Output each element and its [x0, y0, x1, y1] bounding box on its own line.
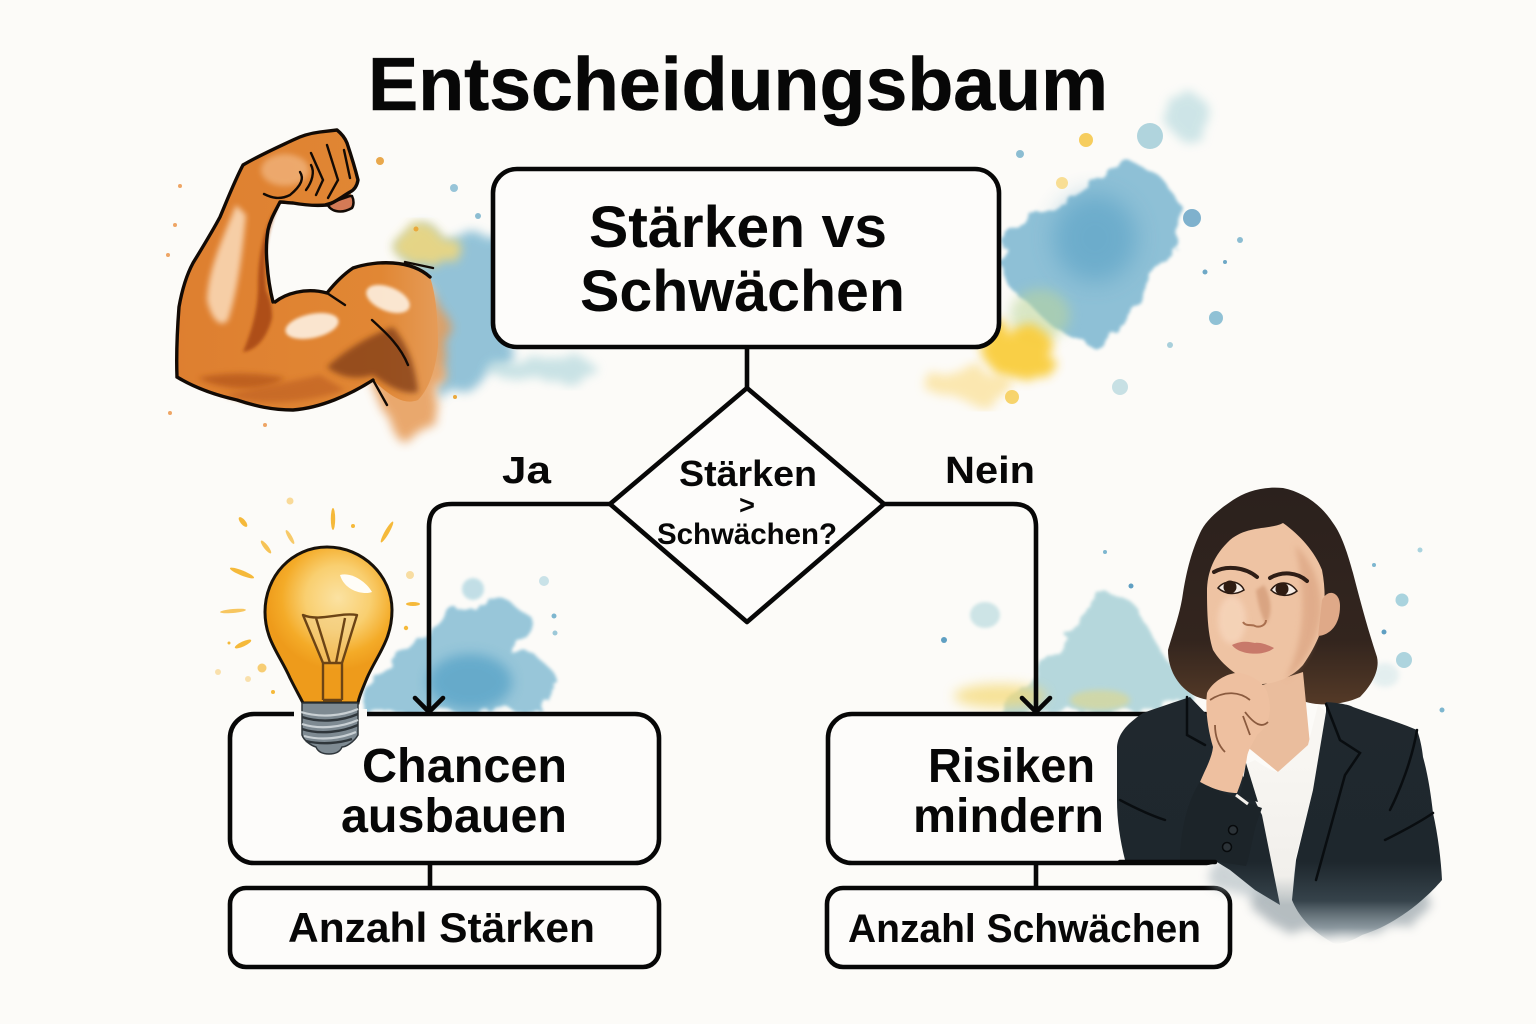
decision diamond: Stärken [679, 453, 817, 494]
box: Risiken mindern [828, 714, 1228, 863]
eyes [1218, 580, 1297, 596]
jacket details [1120, 697, 1433, 880]
muscle fade into splash [375, 268, 446, 443]
neck [1245, 672, 1310, 772]
box: Anzahl Stärken [230, 888, 659, 967]
shirt [1244, 705, 1326, 905]
nose shadow [1256, 585, 1270, 624]
root box: Stärken vs Schwächen: Schwächen [580, 259, 905, 324]
label: Nein: Nein [945, 450, 1035, 492]
armpit shadow [327, 327, 418, 393]
thumb [327, 196, 354, 212]
bulb highlight [340, 574, 372, 593]
decision diamond: > [739, 490, 755, 520]
face [1207, 523, 1325, 684]
screw base [302, 703, 358, 754]
box: Risiken mindern: mindern [913, 790, 1104, 843]
ink wash under jacket [1250, 866, 1430, 934]
illustration: thinking woman [1117, 488, 1442, 944]
eyebrows [1214, 568, 1307, 581]
jacket cuff and sleeve [1180, 782, 1262, 866]
root box: Stärken vs Schwächen: Stärken vs [589, 195, 887, 260]
icon: flexed muscle arm [177, 130, 446, 443]
arm outline [177, 130, 430, 410]
ear [1318, 593, 1340, 636]
shoulder highlight [362, 279, 414, 319]
box: Chancen ausbauen [230, 714, 659, 863]
glass bulb [265, 547, 392, 703]
hair [1168, 488, 1378, 704]
face shading [1285, 545, 1321, 680]
box: Anzahl Schwächen: Anzahl Schwächen [848, 907, 1201, 951]
flowchart connectors [415, 347, 1050, 888]
watercolor splash: behind muscle [166, 157, 596, 427]
box: Anzahl Stärken: Anzahl Stärken [288, 904, 595, 951]
lower arm shadow [198, 374, 285, 388]
bicep highlight [283, 309, 341, 343]
blazer [1117, 697, 1280, 905]
watercolor splash: top right [924, 96, 1243, 404]
sleeve buttons [1228, 826, 1238, 834]
title: Entscheidungsbaum [368, 42, 1108, 126]
box: Anzahl Schwächen [827, 888, 1230, 967]
forearm highlight [207, 205, 246, 323]
root box: Stärken vs Schwächen [493, 169, 999, 347]
nose [1243, 620, 1266, 627]
watercolor splash: behind woman [941, 548, 1444, 712]
decision diamond: Schwächen? [657, 518, 837, 551]
muscle and finger lines [264, 145, 433, 405]
box: Chancen ausbauen: Chancen [362, 740, 567, 793]
icon: light bulb [215, 498, 420, 754]
bottom edge of Risiken box over jacket [1120, 860, 1215, 864]
lips [1232, 642, 1274, 654]
box: Risiken mindern: Risiken [928, 740, 1095, 793]
rays and sparks [215, 498, 420, 694]
filament [303, 614, 357, 700]
finger lines [1210, 693, 1268, 752]
forearm shadow [243, 205, 278, 352]
box: Chancen ausbauen: ausbauen [341, 790, 567, 843]
fist highlight [261, 154, 309, 186]
decision diamond [610, 388, 884, 622]
hand on chin [1200, 673, 1270, 793]
watercolor splash: behind bulb [363, 576, 558, 712]
gap in box line [294, 709, 367, 719]
label: Ja: Ja [502, 450, 552, 492]
